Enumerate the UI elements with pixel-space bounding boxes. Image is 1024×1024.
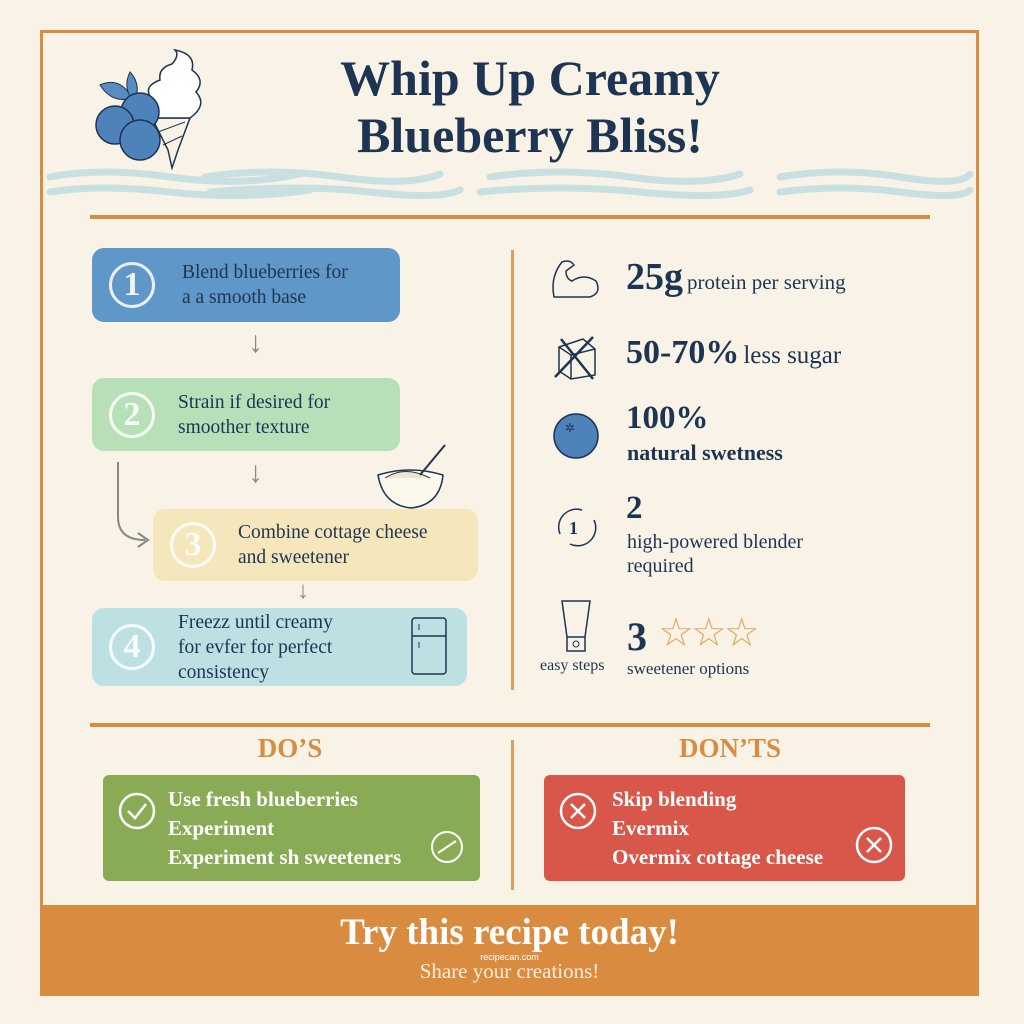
heading: do's: DO’S [258, 733, 322, 763]
footer [40, 905, 979, 996]
stat: protein: 25g protein per serving [626, 256, 846, 298]
title: Blueberry Bliss! [357, 107, 703, 163]
panel: don'ts [544, 775, 905, 881]
icon: fridge [411, 617, 447, 675]
footer: Try this recipe today! [340, 912, 679, 953]
stat: blender: required [627, 555, 694, 577]
step 1 [92, 248, 400, 322]
title [340, 50, 720, 163]
stat: blender: high-powered blender [627, 531, 803, 553]
waves [46, 168, 974, 199]
stat: natural: ✲ [565, 421, 575, 435]
stat: blender: 1 [569, 518, 578, 538]
step 2 [92, 378, 400, 451]
step 1: Blend blueberries for [182, 262, 348, 283]
step 4: for evfer for perfect [178, 636, 332, 658]
step 2: 2 [124, 396, 140, 432]
step 2: smoother texture [178, 416, 310, 438]
step 4: consistency [178, 662, 269, 682]
stat: steps: sweetener options [627, 659, 749, 678]
panel: don'ts: Evermix [612, 816, 689, 840]
panel: don'ts: Skip blending [612, 787, 736, 811]
panel: do's: Experiment [168, 816, 274, 840]
stat: blender [558, 490, 803, 577]
panel: do's: Use fresh blueberries [168, 787, 358, 811]
icon: bowl [377, 444, 446, 509]
step 3: and sweetener [238, 547, 349, 568]
step 4 [92, 608, 467, 686]
icon: blueberries and ice cream [95, 48, 202, 171]
panel: do's [103, 775, 480, 881]
stat: sugar [554, 334, 841, 380]
heading: don'ts: DON’TS [679, 733, 781, 763]
panel: don'ts: Overmix cottage cheese [612, 845, 823, 869]
stat: steps [540, 600, 757, 678]
arrow 3: ↓ [297, 578, 309, 604]
stat: steps: ☆☆☆ [658, 610, 757, 655]
arrow 2: ↓ [248, 456, 263, 489]
stat: blender: 2 [626, 490, 642, 526]
stat: natural: 100% [626, 400, 708, 436]
title: Whip Up Creamy [340, 50, 720, 106]
step 3 [153, 509, 478, 581]
step 1: 1 [124, 266, 140, 303]
step 3: Combine cottage cheese [238, 522, 428, 543]
footer: Share your creations! [420, 959, 599, 983]
step 3: 3 [184, 526, 202, 563]
step 1: a a smooth base [182, 287, 306, 308]
footer: recipecan.com [480, 952, 539, 962]
stat: natural: natural swetness [627, 440, 783, 465]
stat: sugar: 50-70% less sugar [626, 334, 841, 371]
arrow curved [117, 462, 150, 548]
stat: steps: easy steps [540, 657, 604, 674]
stat: steps: 3 [627, 614, 647, 659]
step 4: Freezz until creamy [178, 612, 333, 632]
step 4: 4 [124, 628, 140, 665]
arrow 1: ↓ [248, 326, 263, 359]
panel: do's: Experiment sh sweeteners [168, 845, 401, 869]
stat: natural [553, 400, 783, 465]
step 2: Strain if desired for [178, 392, 330, 412]
